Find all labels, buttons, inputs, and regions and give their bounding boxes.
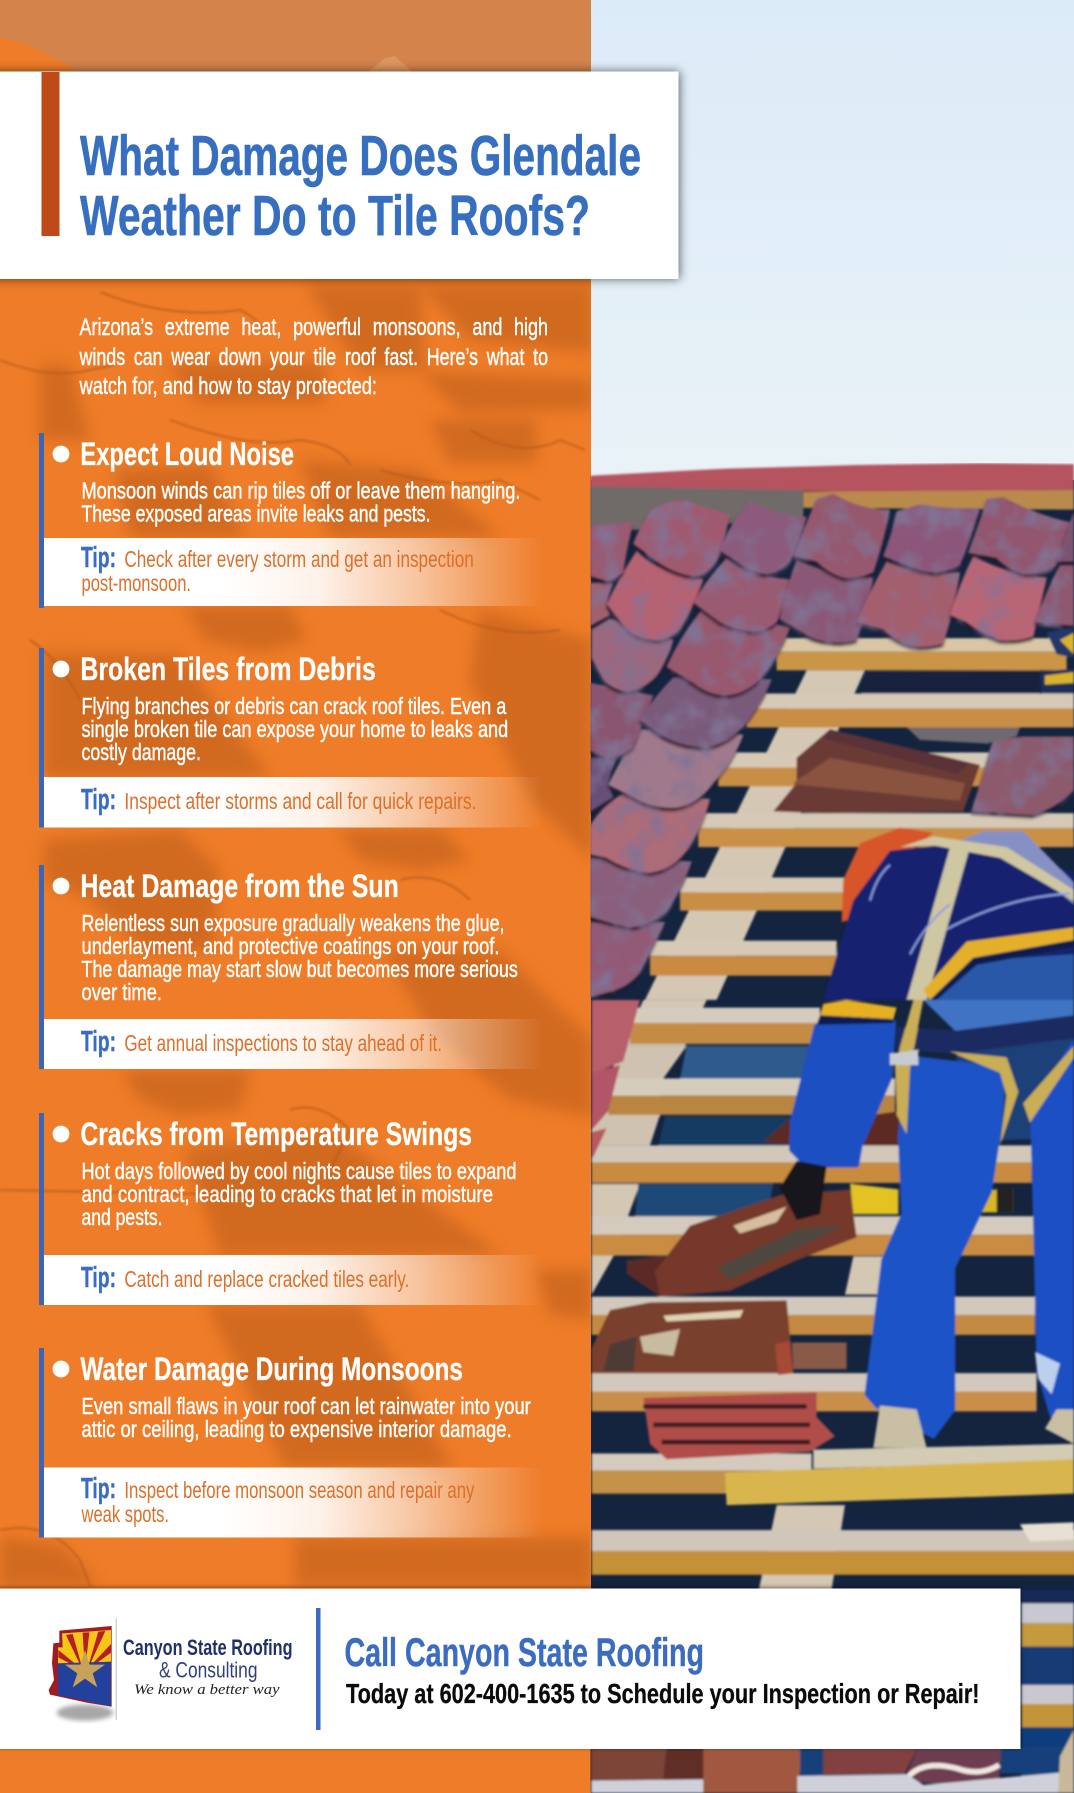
body: underlayment, and protective coatings on your roof. xyxy=(82,933,500,959)
body: Flying branches or debris can crack roof tiles. Even a xyxy=(82,693,507,719)
body: and contract, leading to cracks that let in moisture xyxy=(82,1181,493,1207)
photo lower section: battens, loose tiles and legs xyxy=(592,1000,1074,1600)
tip box xyxy=(44,1468,544,1538)
body: The damage may start slow but becomes more serious xyxy=(82,956,518,982)
logo text: & Consulting xyxy=(159,1658,258,1682)
heading: Water Damage During Monsoons xyxy=(80,1351,463,1387)
tip box: Inspect after storms and call for quick repairs. xyxy=(124,788,476,814)
body xyxy=(82,1158,516,1230)
body: over time. xyxy=(82,979,162,1005)
tip box: Inspect before monsoon season and repair any xyxy=(124,1477,475,1503)
yellow tool xyxy=(850,1184,1013,1214)
tip box xyxy=(44,1019,544,1069)
body xyxy=(82,1393,531,1442)
bullet xyxy=(53,1361,69,1377)
body: costly damage. xyxy=(82,739,201,765)
tip box: post-monsoon. xyxy=(82,570,191,596)
panel: Broken Tiles from Debris xyxy=(39,648,544,828)
body: Hot days followed by cool nights cause tiles to expand xyxy=(82,1158,516,1184)
accent bar xyxy=(42,72,60,236)
bullet xyxy=(53,1126,69,1142)
panel: Cracks from Temperature Swings xyxy=(39,1113,544,1305)
body xyxy=(82,693,508,765)
heading: Expect Loud Noise xyxy=(80,436,294,472)
body xyxy=(82,910,518,1005)
intro paragraph: watch for, and how to stay protected: xyxy=(79,373,377,400)
tip box: Tip: xyxy=(81,1262,116,1294)
tip box: weak spots. xyxy=(81,1501,169,1527)
body: and pests. xyxy=(82,1204,162,1230)
body xyxy=(82,478,520,526)
tip box xyxy=(44,1255,544,1305)
tip box: Tip: xyxy=(81,542,116,574)
body: These exposed areas invite leaks and pests. xyxy=(82,500,430,526)
photo upper section: roof tiles and battens xyxy=(590,463,1074,1000)
heading: Heat Damage from the Sun xyxy=(80,868,399,904)
tip box: Get annual inspections to stay ahead of it. xyxy=(124,1030,442,1056)
heading: Cracks from Temperature Swings xyxy=(80,1116,472,1152)
tip box: Check after every storm and get an inspection xyxy=(124,546,474,572)
bullet xyxy=(53,661,69,677)
tip box: Catch and replace cracked tiles early. xyxy=(124,1266,409,1292)
tip box: Tip: xyxy=(81,1473,116,1505)
top muted band xyxy=(0,0,592,72)
title heading xyxy=(80,124,641,248)
call to action heading: Call Canyon State Roofing xyxy=(344,1631,704,1675)
bullet xyxy=(53,878,69,894)
title panel xyxy=(0,72,678,279)
stacked tiles xyxy=(773,729,980,813)
intro paragraph xyxy=(79,314,548,400)
bullet xyxy=(53,446,69,462)
heading: Broken Tiles from Debris xyxy=(80,651,376,687)
panel: orange tile background xyxy=(0,0,592,1793)
panel: Expect Loud Noise xyxy=(39,433,544,608)
panel: Heat Damage from the Sun xyxy=(39,865,544,1069)
worker legs xyxy=(780,1000,1074,1448)
logo text: Canyon State Roofing xyxy=(123,1635,292,1660)
tiles xyxy=(590,494,1074,997)
body: Relentless sun exposure gradually weakens the glue, xyxy=(82,910,504,936)
body: Monsoon winds can rip tiles off or leave them hanging. xyxy=(82,478,520,504)
title heading: Weather Do to Tile Roofs? xyxy=(80,184,590,248)
body: single broken tile can expose your home to leaks and xyxy=(82,716,508,742)
photo: roofer working on tile roof xyxy=(590,0,1074,1793)
intro paragraph: Arizona’s extreme heat, powerful monsoons, and high xyxy=(80,314,548,341)
worker upper body xyxy=(823,827,1074,1000)
title heading: What Damage Does Glendale xyxy=(80,124,641,188)
logo text: We know a better way xyxy=(134,1682,280,1698)
body: Even small flaws in your roof can let rainwater into your xyxy=(82,1393,531,1419)
tip box: Tip: xyxy=(81,784,116,816)
tip box: Tip: xyxy=(81,1026,116,1058)
intro paragraph: winds can wear down your tile roof fast. Here’s what to xyxy=(79,344,548,371)
logo text xyxy=(123,1635,292,1698)
panel: Water Damage During Monsoons xyxy=(39,1348,544,1538)
body: attic or ceiling, leading to expensive interior damage. xyxy=(82,1416,512,1442)
icon: Arizona logo xyxy=(49,1618,117,1721)
photo bottom strip: battens and tiles below banner xyxy=(590,1590,1074,1793)
tip box xyxy=(44,538,544,606)
broken tiles xyxy=(592,1189,857,1459)
footer banner xyxy=(0,1588,1020,1749)
tip box xyxy=(44,777,544,828)
